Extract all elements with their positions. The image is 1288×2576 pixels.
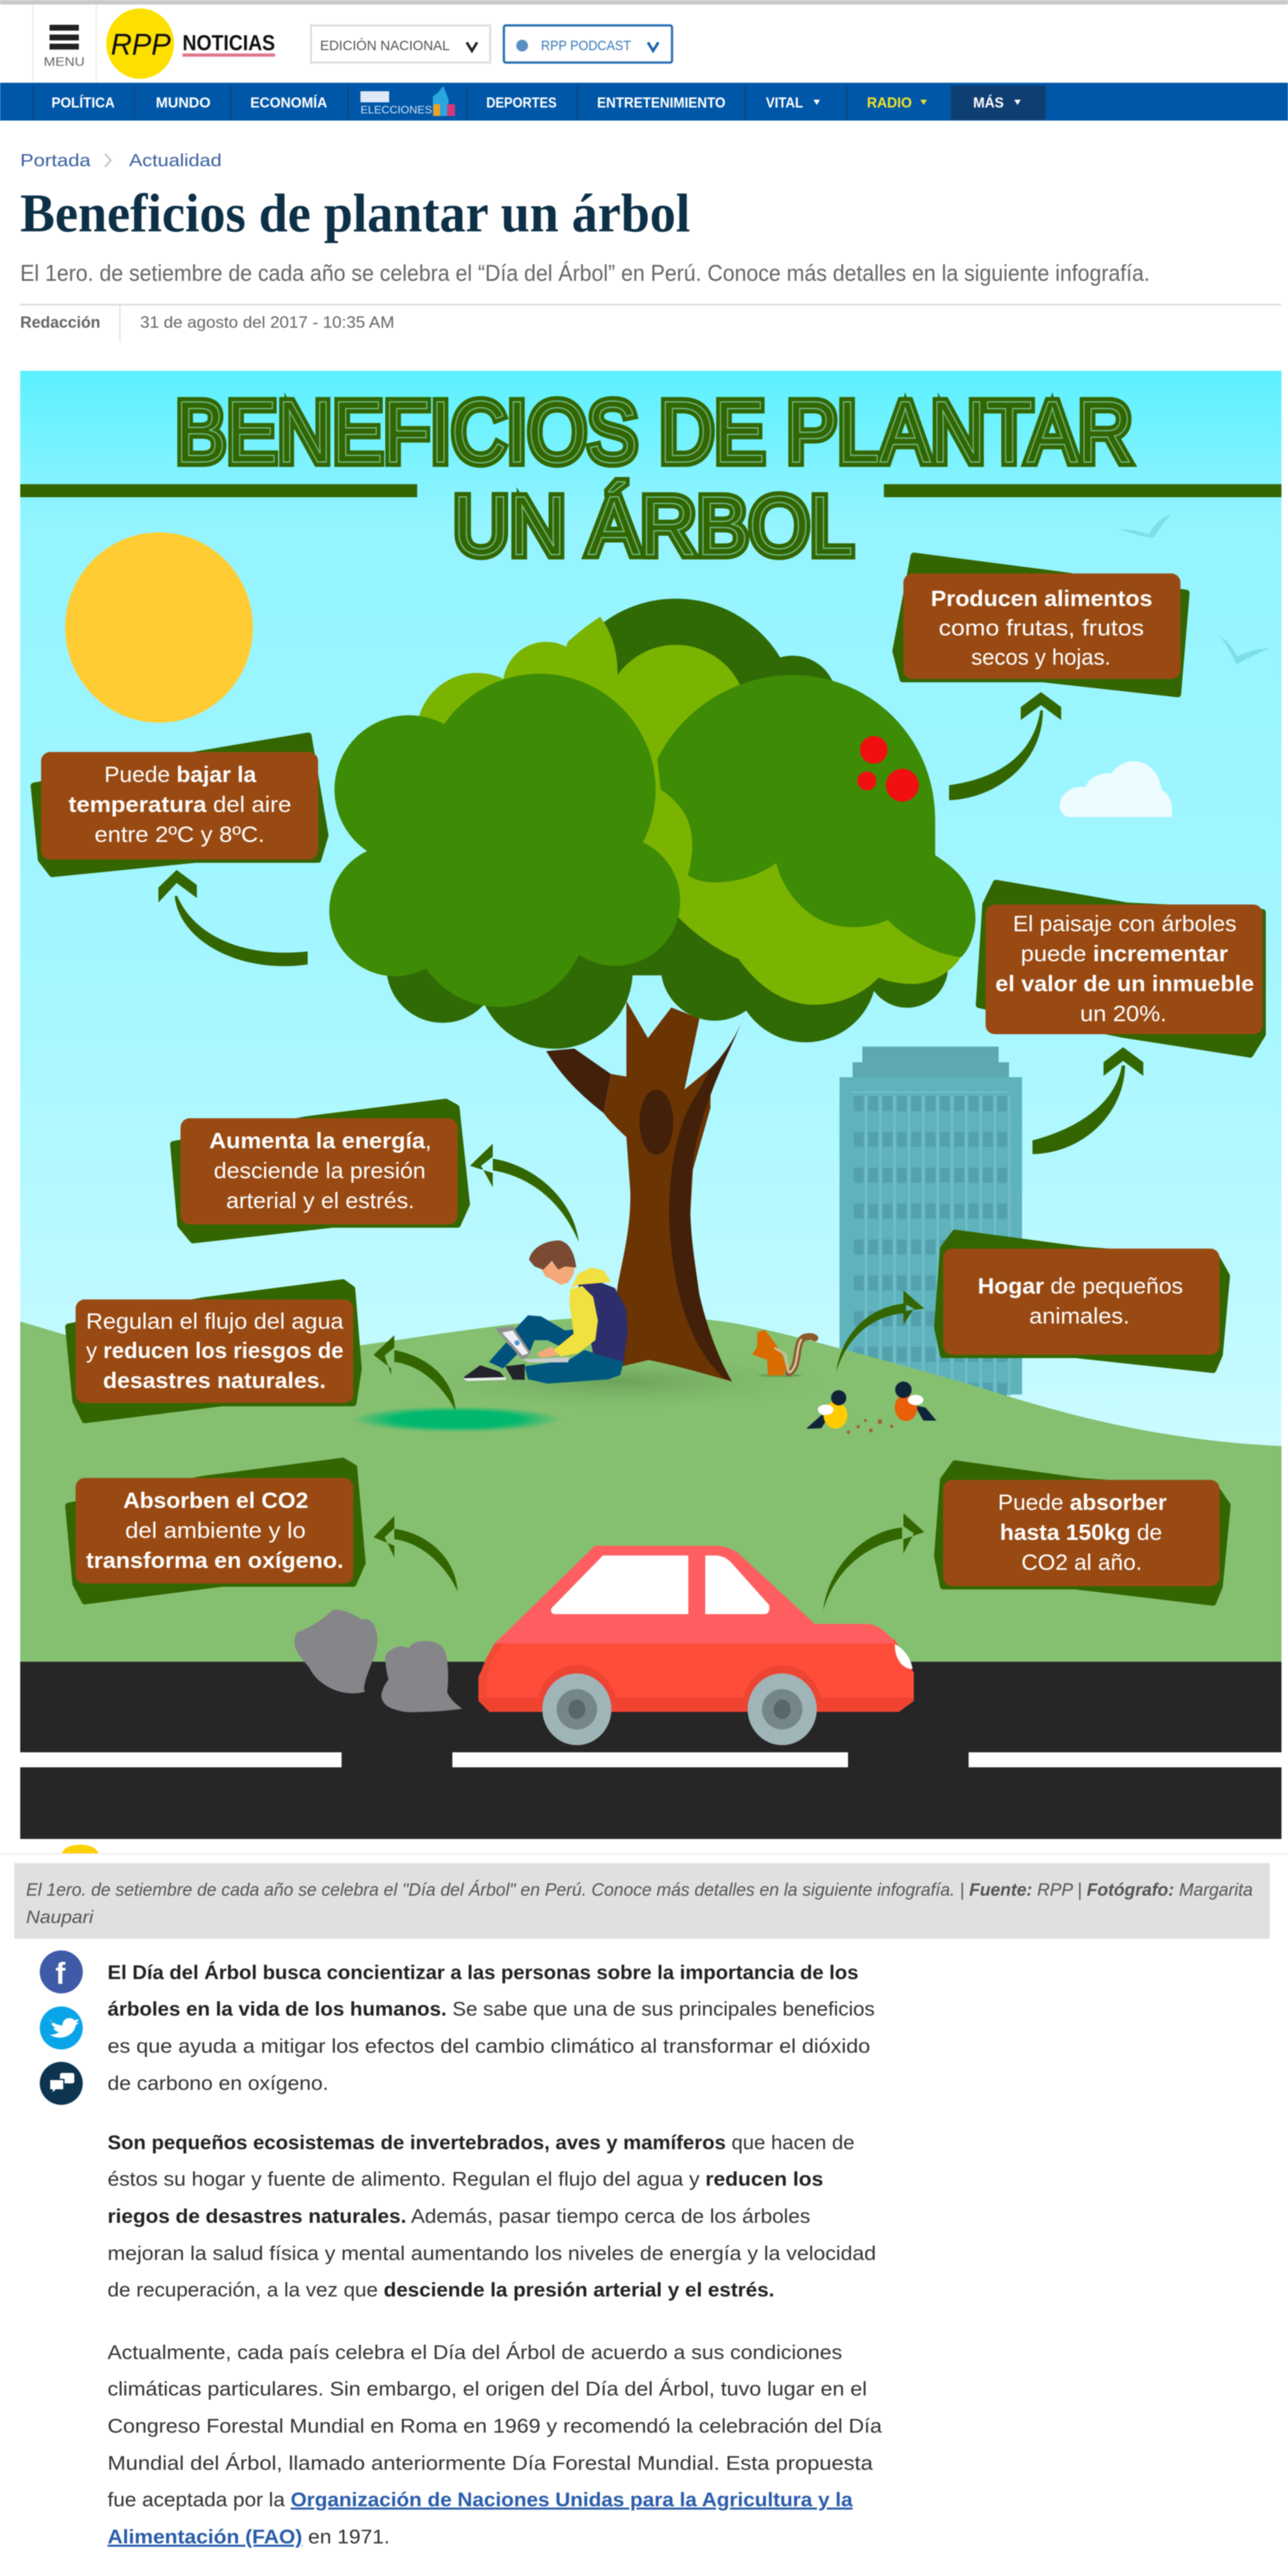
article paragraph 2: de recuperación, a la vez que desciende la presión arterial y el estrés. bbox=[108, 2278, 774, 2301]
icon: orange bird bbox=[895, 1382, 937, 1421]
canopy: light layer bbox=[417, 616, 961, 1005]
icon: squirrel bbox=[752, 1330, 815, 1377]
site header bbox=[0, 0, 1288, 83]
callout: hogar bbox=[937, 1233, 1227, 1370]
callout: absorber: CO2 al año. bbox=[1021, 1550, 1142, 1575]
callout: temperatura: temperatura del aire bbox=[68, 792, 291, 817]
car windows bbox=[551, 1556, 769, 1614]
icon: hamburger menu: MENU bbox=[44, 55, 85, 68]
sky background bbox=[20, 371, 1281, 1479]
wheel arches bbox=[538, 1665, 821, 1698]
article paragraph 2: mejoran la salud física y mental aumentando los niveles de energía y la velocidad bbox=[108, 2242, 876, 2265]
callout: alimentos bbox=[896, 556, 1186, 694]
tree trunk bbox=[546, 1001, 745, 1382]
social share icons bbox=[40, 1950, 83, 2105]
dropdown: RPP podcast: RPP PODCAST bbox=[541, 38, 631, 53]
arrow: to food callout bbox=[949, 692, 1061, 800]
infographic bbox=[20, 371, 1281, 1839]
article subtitle: El 1ero. de setiembre de cada año se celebra el “Día del Árbol” en Perú. Conoce más detalles en la siguiente infografía. bbox=[20, 261, 1150, 286]
callout: valor inmueble: puede incrementar bbox=[1021, 942, 1228, 966]
article headline: Beneficios de plantar un árbol bbox=[20, 183, 690, 244]
person with laptop bbox=[463, 1240, 628, 1383]
article paragraph 3: Alimentación (FAO) en 1971. bbox=[108, 2525, 390, 2548]
photo caption bbox=[14, 1863, 1270, 1939]
squirrel and birds bbox=[752, 1330, 937, 1434]
photo caption: Naupari bbox=[26, 1907, 94, 1927]
icon: yellow bird bbox=[806, 1390, 847, 1429]
callout: energía: arterial y el estrés. bbox=[226, 1189, 415, 1213]
ground bbox=[20, 1316, 1281, 1668]
photo caption: El 1ero. de setiembre de cada año se celebra el "Día del Árbol" en Perú. Conoce más detalles en la siguiente infografía. | Fuente: RPP | Fotógrafo: Margarita bbox=[26, 1879, 1253, 1900]
byline and date: 31 de agosto del 2017 - 10:35 AM bbox=[140, 313, 394, 332]
breadcrumb: Actualidad bbox=[129, 151, 222, 170]
navigation bar: ECONOMÍA bbox=[250, 94, 327, 111]
arrow: to small animals callout bbox=[836, 1290, 924, 1372]
callout: valor inmueble: el valor de un inmueble bbox=[995, 972, 1254, 996]
arrow: to temperature callout bbox=[158, 870, 308, 966]
yellow logo fragment bbox=[62, 1845, 98, 1854]
callout: alimentos: Producen alimentos bbox=[931, 586, 1152, 611]
breadcrumb bbox=[20, 151, 222, 170]
divider bbox=[0, 1853, 1288, 1855]
logo: RPP Noticias: RPP bbox=[111, 27, 171, 61]
callout: absorber bbox=[937, 1464, 1227, 1602]
tree canopy bbox=[329, 599, 975, 1049]
callout: CO2: transforma en oxígeno. bbox=[86, 1548, 344, 1573]
arrow: to energy callout bbox=[470, 1144, 579, 1242]
icon: elecciones logo bbox=[360, 86, 455, 116]
navigation bar bbox=[0, 83, 1288, 121]
callout: valor inmueble: un 20%. bbox=[1080, 1002, 1167, 1026]
arrow: to absorption callout bbox=[823, 1513, 924, 1610]
article paragraph 3: climáticas particulares. Sin embargo, el origen del Día del Árbol, tuvo lugar en el bbox=[108, 2377, 867, 2400]
icon: facebook bbox=[40, 1950, 83, 1993]
canopy: main layer bbox=[329, 674, 975, 1007]
logo: RPP Noticias: NOTICIAS bbox=[183, 31, 275, 55]
arrow: to water flow callout bbox=[373, 1335, 456, 1411]
car bbox=[478, 1546, 914, 1754]
callout: temperatura: entre 2ºC y 8ºC. bbox=[95, 822, 265, 847]
exhaust smoke bbox=[295, 1610, 462, 1713]
infographic title: UN ÁRBOL bbox=[453, 480, 853, 573]
callout: absorber: Puede absorber bbox=[998, 1490, 1167, 1515]
navigation bar: VITAL bbox=[766, 94, 803, 111]
article paragraph 2 bbox=[108, 2131, 876, 2301]
callout: CO2 bbox=[68, 1461, 362, 1601]
building bbox=[840, 1047, 1022, 1396]
callout: valor inmueble bbox=[979, 883, 1263, 1054]
infographic title bbox=[20, 384, 1281, 573]
article paragraph 3 bbox=[108, 2341, 883, 2548]
article paragraph 3: Actualmente, cada país celebra el Día del Árbol de acuerdo a sus condiciones bbox=[108, 2341, 842, 2364]
tree bbox=[329, 599, 975, 1382]
article paragraph 2: éstos su hogar y fuente de alimento. Regulan el flujo del agua y reducen los bbox=[108, 2167, 823, 2190]
pond bbox=[352, 1406, 561, 1432]
dropdown: edición nacional bbox=[311, 25, 490, 63]
icon: cloud bbox=[1060, 761, 1172, 817]
breadcrumb: Portada bbox=[20, 151, 91, 170]
dropdown: RPP podcast bbox=[504, 25, 672, 63]
callout: energía: desciende la presión bbox=[214, 1159, 426, 1183]
icon: twitter bbox=[40, 2006, 83, 2049]
navigation bar: RADIO bbox=[867, 94, 912, 111]
callout: CO2: Absorben el CO2 bbox=[123, 1488, 308, 1513]
callout: alimentos: como frutas, frutos bbox=[939, 616, 1144, 641]
callout: flujo del agua: desastres naturales. bbox=[103, 1368, 326, 1393]
article paragraph 3: fue aceptada por la Organización de Naciones Unidas para la Agricultura y la bbox=[108, 2488, 853, 2511]
car wheels bbox=[542, 1673, 817, 1745]
seeds bbox=[847, 1419, 894, 1434]
article paragraph 2: Son pequeños ecosistemas de invertebrados, aves y mamíferos que hacen de bbox=[108, 2131, 855, 2154]
article paragraph 1: es que ayuda a mitigar los efectos del cambio climático al transformar el dióxido bbox=[108, 2034, 870, 2057]
callout: absorber: hasta 150kg de bbox=[1000, 1520, 1162, 1545]
callout: CO2: del ambiente y lo bbox=[125, 1518, 306, 1543]
navigation bar: MÁS bbox=[973, 94, 1004, 111]
icon: birds bbox=[1119, 514, 1269, 664]
infographic title: UN ÁRBOL bbox=[453, 480, 853, 573]
icon: sun bbox=[65, 532, 253, 723]
arrow: to property value callout bbox=[1032, 1047, 1143, 1154]
arrow: to CO2 callout bbox=[373, 1516, 458, 1591]
article paragraph 1: árboles en la vida de los humanos. Se sabe que una de sus principales beneficios bbox=[108, 1997, 875, 2020]
article paragraph 1 bbox=[108, 1961, 875, 2094]
callout: flujo del agua bbox=[68, 1282, 359, 1420]
icon: comments bbox=[40, 2062, 83, 2105]
infographic title: BENEFICIOS DE PLANTAR bbox=[175, 384, 1133, 481]
article paragraph 1: El Día del Árbol busca concientizar a las personas sobre la importancia de los bbox=[108, 1961, 858, 1984]
icon: apples bbox=[857, 736, 919, 802]
canopy: dark layer bbox=[387, 599, 948, 1049]
dropdown: edición nacional: EDICIÓN NACIONAL bbox=[320, 38, 450, 53]
byline and date bbox=[20, 304, 1281, 342]
navigation bar: DEPORTES bbox=[486, 94, 557, 111]
infographic title: BENEFICIOS DE PLANTAR bbox=[175, 384, 1133, 481]
callout: hogar: animales. bbox=[1029, 1304, 1130, 1329]
icon: elecciones logo: ELECCIONES bbox=[360, 104, 432, 116]
navigation bar: ENTRETENIMIENTO bbox=[597, 94, 725, 111]
article paragraph 1: de carbono en oxígeno. bbox=[108, 2072, 329, 2094]
callout: temperatura bbox=[34, 736, 325, 874]
callout: flujo del agua: y reducen los riesgos de bbox=[86, 1339, 344, 1363]
callout: alimentos: secos y hojas. bbox=[971, 645, 1111, 670]
article paragraph 2: riegos de desastres naturales. Además, pasar tiempo cerca de los árboles bbox=[108, 2205, 810, 2227]
callout: valor inmueble: El paisaje con árboles bbox=[1013, 912, 1237, 936]
navigation bar: MUNDO bbox=[156, 94, 211, 111]
callout: energía: Aumenta la energía , bbox=[209, 1129, 432, 1153]
callout: flujo del agua: Regulan el flujo del agua bbox=[86, 1309, 344, 1334]
callout: energía bbox=[173, 1102, 467, 1240]
logo: RPP Noticias bbox=[106, 8, 275, 79]
road bbox=[20, 1662, 1281, 1839]
byline and date: Redacción bbox=[20, 313, 100, 332]
article paragraph 3: Mundial del Árbol, llamado anteriormente Día Forestal Mundial. Esta propuesta bbox=[108, 2452, 873, 2474]
icon: facebook: f bbox=[55, 1956, 66, 1990]
navigation bar: POLÍTICA bbox=[51, 94, 115, 111]
article paragraph 3: Congreso Forestal Mundial en Roma en 1969 y recomendó la celebración del Día bbox=[108, 2414, 883, 2437]
callout: hogar: Hogar de pequeños bbox=[978, 1274, 1183, 1299]
callout: temperatura: Puede bajar la bbox=[104, 762, 257, 787]
icon: hamburger menu bbox=[44, 25, 85, 68]
